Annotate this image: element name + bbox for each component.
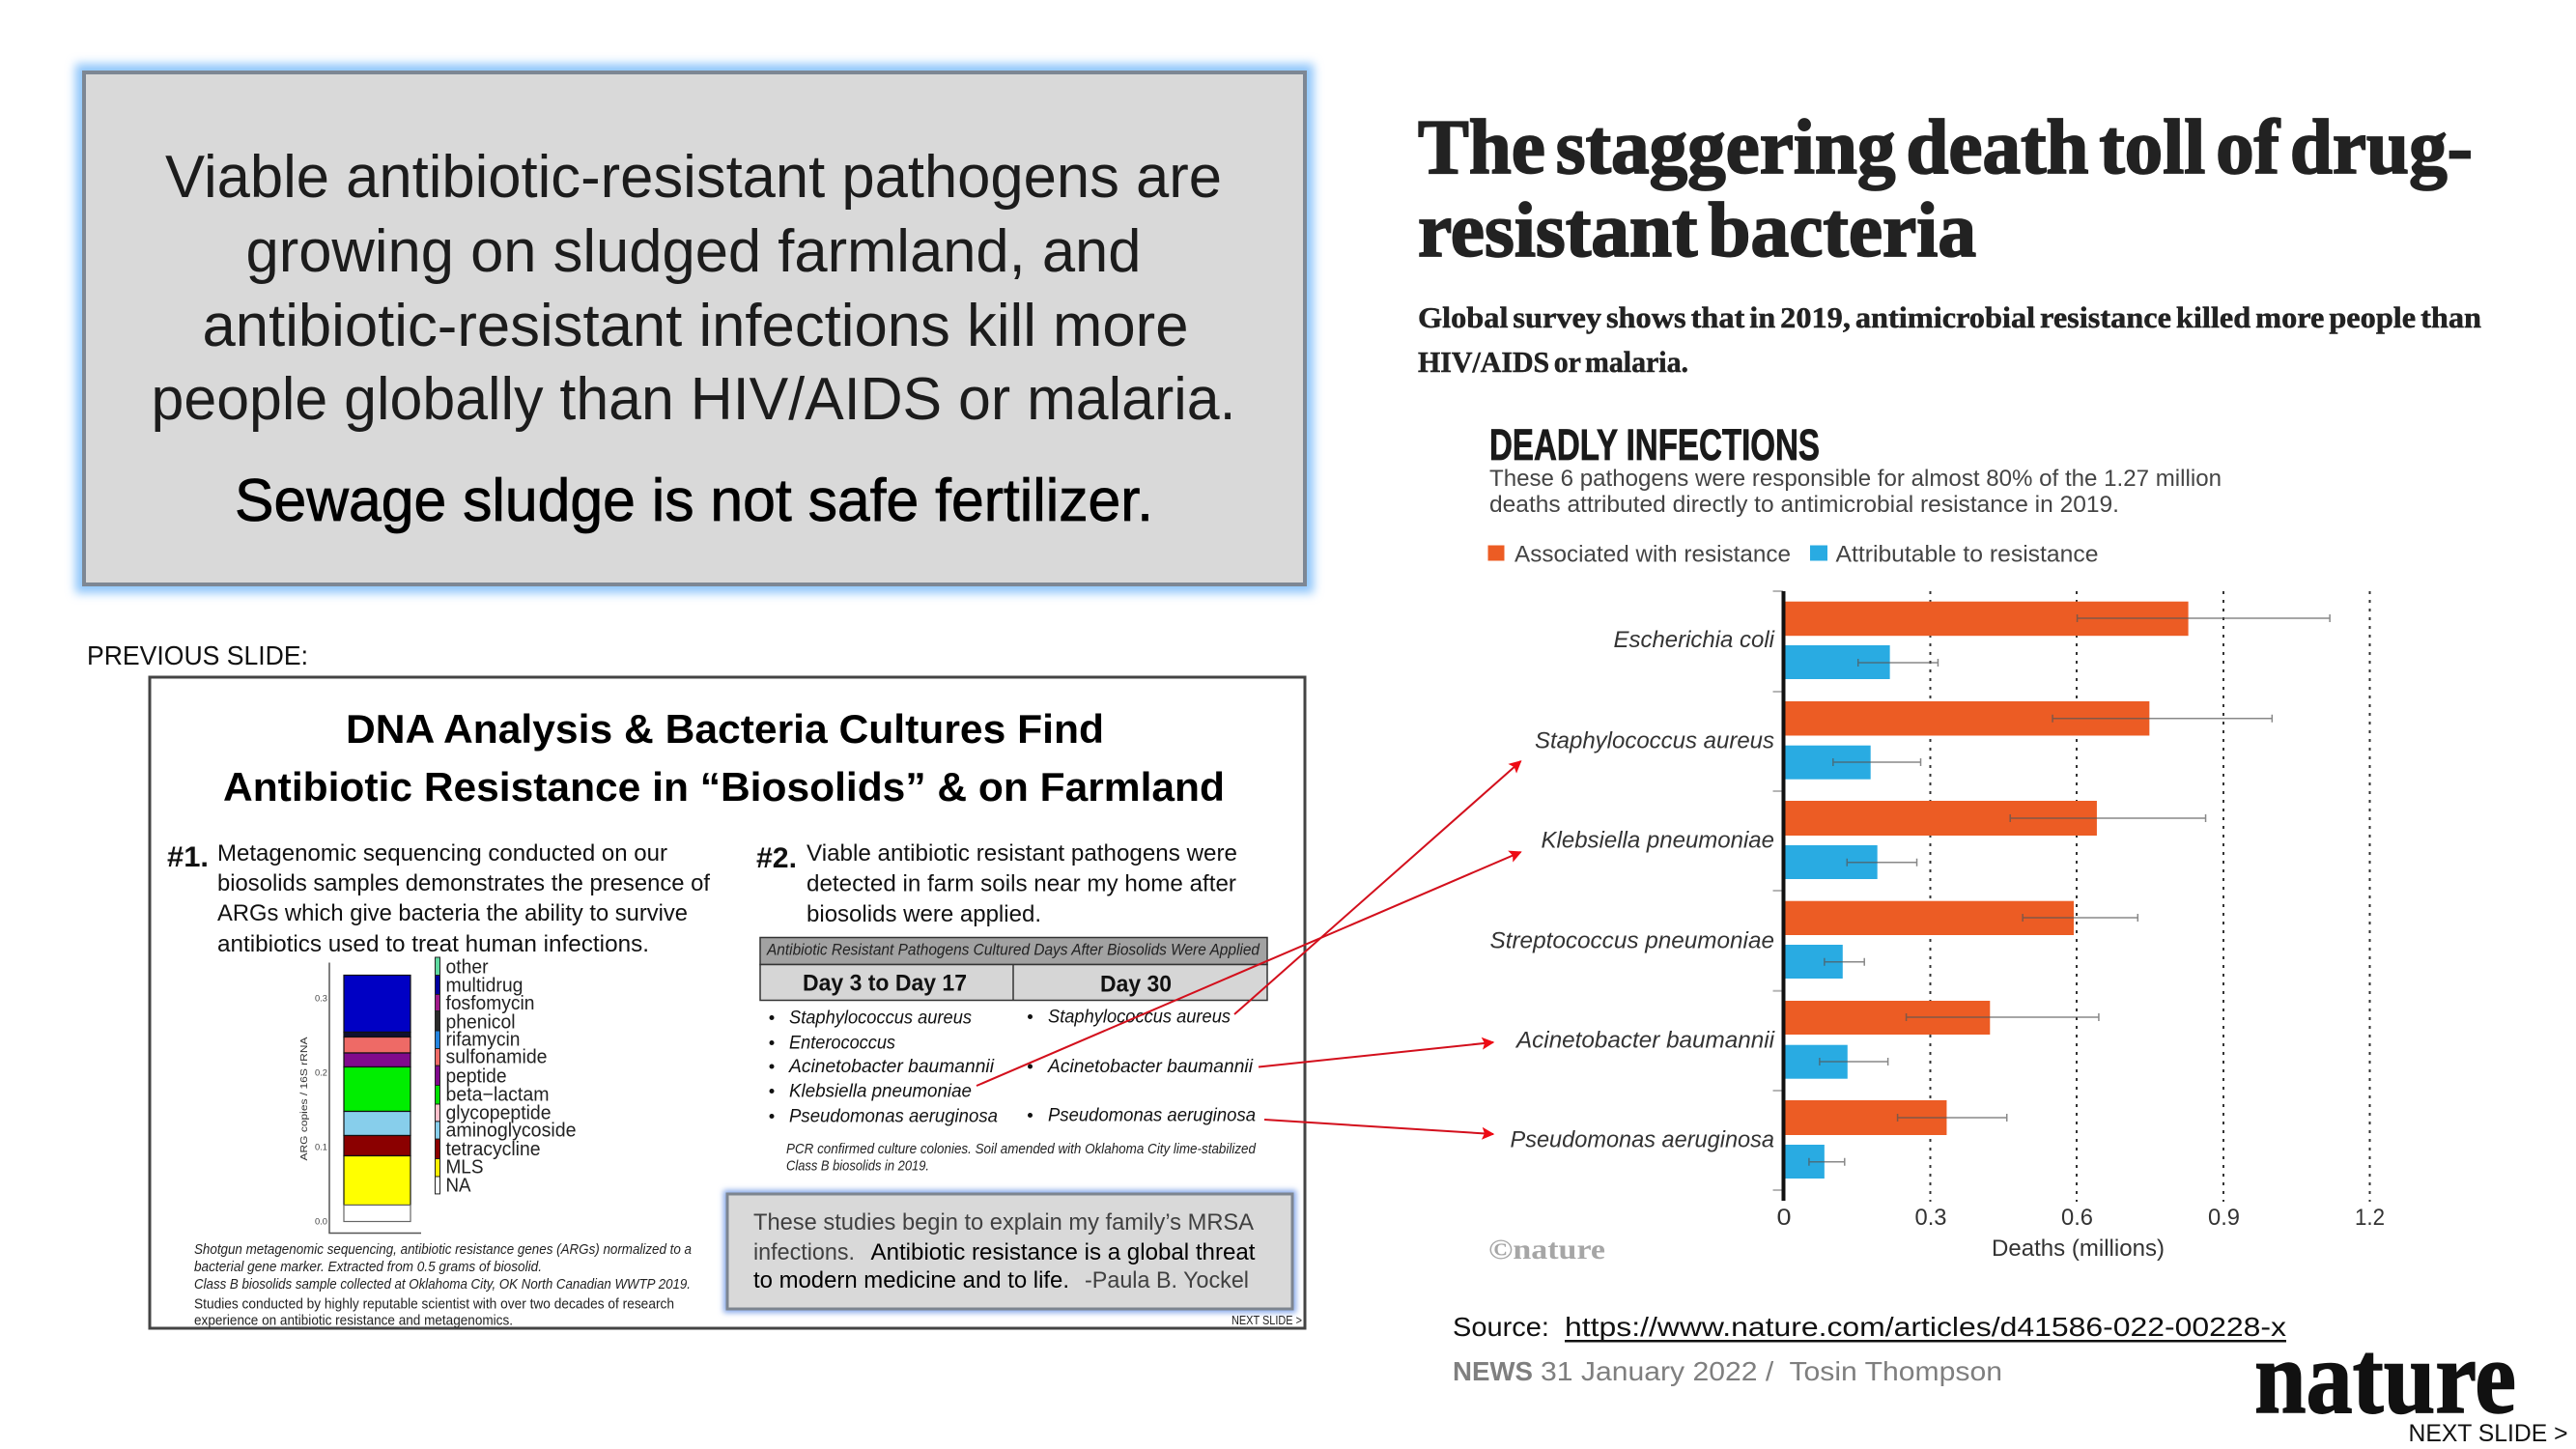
x axis labels: Deaths (millions) [1992, 1236, 2165, 1262]
chart legend: sulfonamide [446, 1047, 547, 1068]
callout: family quote: Antibiotic resistance is a global threat [871, 1239, 1256, 1265]
main message text: Viable antibiotic-resistant pathogens are [165, 144, 1222, 211]
thumbnail heading: DNA Analysis & Bacteria Cultures Find [346, 706, 1104, 752]
x axis labels: 1.2 [2355, 1205, 2385, 1231]
bars: Streptococcus pneumoniae [1784, 901, 2137, 979]
chart legend: beta−lactam [446, 1084, 549, 1105]
finding 1 text: antibiotics used to treat human infections. [217, 931, 649, 957]
pathogen labels: Staphylococcus aureus [1535, 728, 1774, 753]
pathogen labels: Klebsiella pneumoniae [1542, 827, 1774, 854]
chart heading: deadly infections: DEADLY INFECTIONS [1489, 420, 1820, 469]
bars: Acinetobacter baumannii [1784, 1001, 2099, 1079]
chart legend: phenicol [446, 1012, 516, 1034]
finding 2 text: Viable antibiotic resistant pathogens were [807, 840, 1237, 867]
chart legend: resistance categories: Attributable to resistance [1835, 541, 2098, 568]
pathogen labels: Acinetobacter baumannii [1514, 1028, 1775, 1053]
pathogen labels [1489, 627, 1775, 1153]
article headline: The staggering death toll of drug- [1418, 105, 2473, 190]
stacked bar chart: ARG copies: 0.1 [315, 1142, 327, 1153]
x axis labels [1777, 1205, 2385, 1262]
x axis labels: 0.9 [2208, 1205, 2240, 1231]
stacked bar chart: ARG copies: 0.3 [315, 993, 327, 1005]
chart caption [194, 1242, 692, 1329]
chart caption: Shotgun metagenomic sequencing, antibiotic resistance genes (ARGs) normalized to a [194, 1242, 692, 1258]
pathogen list: day 30: Pseudomonas aeruginosa [1048, 1105, 1256, 1126]
callout: family quote: infections. [753, 1239, 855, 1265]
chart legend: fosfomycin [446, 993, 535, 1014]
callout: family quote: to modern medicine and to life. [753, 1267, 1069, 1293]
chart legend: glycopeptide [446, 1103, 551, 1124]
chart legend: aminoglycoside [446, 1121, 576, 1142]
pathogen list: day 30 [1028, 1007, 1256, 1126]
panel: previous slide thumbnail [150, 677, 1305, 1329]
chart caption: Class B biosolids sample collected at Oklahoma City, OK North Canadian WWTP 2019. [194, 1277, 691, 1293]
chart legend: resistance categories: Associated with resistance [1514, 541, 1791, 568]
pathogen list: day 30: Staphylococcus aureus [1048, 1007, 1231, 1028]
panel: main message box [75, 64, 1314, 593]
thumbnail heading [223, 706, 1225, 810]
article subheading: HIV/AIDS or malaria. [1418, 345, 1688, 379]
chart description [1489, 466, 2222, 518]
pathogen list: day 3 to 17: Acinetobacter baumannii [788, 1057, 995, 1077]
article headline [1418, 105, 2473, 273]
pathogens table [760, 937, 1267, 1001]
chart legend: MLS [446, 1157, 483, 1179]
table footnote [786, 1142, 1257, 1175]
table footnote: Class B biosolids in 2019. [786, 1159, 929, 1175]
chart description: deaths attributed directly to antimicrobial resistance in 2019. [1489, 492, 2119, 518]
next slide label: NEXT SLIDE > [2409, 1420, 2567, 1447]
pathogen list: day 3 to 17: Klebsiella pneumoniae [789, 1082, 972, 1101]
article byline: 31 January 2022 / Tosin Thompson [1541, 1356, 2002, 1386]
arrow: Pseudomonas aeruginosa [1264, 1120, 1493, 1134]
nature logo: nature [2254, 1321, 2516, 1435]
pathogens table: Day 3 to Day 17 [803, 970, 967, 997]
chart caption: experience on antibiotic resistance and metagenomics. [194, 1314, 513, 1329]
finding 1 text: #1. [167, 841, 209, 873]
main message text: people globally than HIV/AIDS or malaria. [151, 366, 1236, 433]
finding 2 text [756, 840, 1237, 927]
horizontal bar chart: deaths by pathogen [1489, 591, 2385, 1262]
x axis labels: 0 [1777, 1205, 1791, 1231]
chart description: These 6 pathogens were responsible for almost 80% of the 1.27 million [1489, 466, 2222, 492]
finding 2 text: biosolids were applied. [807, 901, 1041, 927]
finding 1 text: ARGs which give bacteria the ability to survive [217, 900, 688, 926]
main message text: growing on sludged farmland, and [245, 218, 1142, 285]
pathogen list: day 30: Acinetobacter baumannii [1047, 1057, 1254, 1077]
chart caption: bacterial gene marker. Extracted from 0.5 grams of biosolid. [194, 1260, 542, 1275]
bars: Escherichia coli [1784, 602, 2330, 679]
stacked bar chart: ARG copies: 0.2 [315, 1068, 327, 1078]
arrow: Staphylococcus aureus [1234, 761, 1520, 1014]
bars: Pseudomonas aeruginosa [1784, 1100, 2007, 1179]
article byline: NEWS [1453, 1356, 1533, 1386]
thumbnail heading: Antibiotic Resistance in “Biosolids” & on Farmland [223, 764, 1225, 810]
pathogen labels: Escherichia coli [1613, 627, 1775, 653]
article subheading [1418, 300, 2481, 379]
chart legend: other [446, 956, 489, 978]
bars: Klebsiella pneumoniae [1784, 801, 2206, 879]
nature copyright mark: ©nature [1488, 1234, 1605, 1265]
previous slide label: PREVIOUS SLIDE: [87, 640, 308, 670]
chart legend: NA [446, 1175, 471, 1196]
pathogen labels: Streptococcus pneumoniae [1489, 927, 1774, 954]
finding 2 text: #2. [756, 842, 797, 874]
source link: https://www.nature.com/articles/d41586-022-00228-x [1565, 1312, 2286, 1342]
thumbnail next slide label: NEXT SLIDE > [1231, 1314, 1302, 1327]
stacked bar chart: ARG copies [298, 962, 421, 1233]
article headline: resistant bacteria [1418, 188, 1976, 273]
conclusion statement: Sewage sludge is not safe fertilizer. [235, 468, 1153, 534]
pathogens table: Antibiotic Resistant Pathogens Cultured Days After Biosolids Were Applied [766, 941, 1260, 958]
arrows: pathogens to chart labels [977, 761, 1520, 1134]
pathogen labels: Pseudomonas aeruginosa [1511, 1126, 1774, 1153]
finding 2 text: detected in farm soils near my home after [807, 871, 1236, 897]
bars: Staphylococcus aureus [1784, 701, 2272, 780]
pathogen list: day 3 to 17 [769, 1009, 998, 1126]
finding 1 text [167, 840, 710, 957]
article subheading: Global survey shows that in 2019, antimicrobial resistance killed more people than [1418, 300, 2481, 334]
source link: Source: [1453, 1312, 1549, 1342]
chart legend [435, 956, 576, 1196]
x axis labels: 0.3 [1914, 1205, 1947, 1231]
main message text: antibiotic-resistant infections kill more [203, 293, 1188, 359]
chart legend: resistance categories [1487, 541, 2098, 568]
callout: family quote: These studies begin to explain my family’s MRSA [753, 1209, 1255, 1236]
table footnote: PCR confirmed culture colonies. Soil amended with Oklahoma City lime-stabilized [786, 1142, 1257, 1157]
chart legend: rifamycin [446, 1030, 520, 1051]
pathogen list: day 3 to 17: Pseudomonas aeruginosa [789, 1107, 998, 1126]
chart legend: multidrug [446, 976, 524, 997]
callout: family quote: -Paula B. Yockel [1085, 1267, 1249, 1293]
x axis labels: 0.6 [2061, 1205, 2093, 1231]
arrow: Klebsiella pneumoniae [977, 852, 1520, 1086]
chart caption: Studies conducted by highly reputable scientist with over two decades of research [194, 1296, 674, 1312]
chart legend: peptide [446, 1066, 506, 1088]
stacked bar chart: ARG copies: 0.0 [315, 1217, 327, 1227]
main message text [151, 144, 1236, 433]
pathogens table: Day 30 [1100, 972, 1172, 997]
chart legend: tetracycline [446, 1139, 541, 1160]
arrow: Acinetobacter baumannii [1259, 1042, 1493, 1066]
finding 1 text: Metagenomic sequencing conducted on our [217, 840, 667, 867]
pathogen list: day 3 to 17: Enterococcus [789, 1034, 895, 1053]
callout: family quote [723, 1190, 1296, 1313]
finding 1 text: biosolids samples demonstrates the presence of [217, 870, 710, 896]
stacked bar chart: ARG copies: ARG copies / 16S rRNA [298, 1037, 310, 1161]
pathogen list: day 3 to 17: Staphylococcus aureus [789, 1009, 972, 1028]
